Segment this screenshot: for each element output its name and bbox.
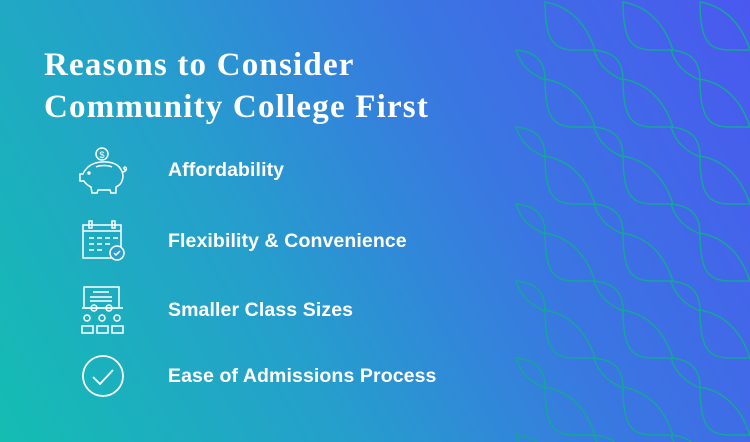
title bbox=[44, 47, 429, 125]
icon: piggy bank: $ bbox=[99, 150, 105, 160]
title: Reasons to Consider bbox=[44, 47, 355, 83]
label: affordability: Affordability bbox=[168, 159, 284, 181]
icon: calendar bbox=[82, 220, 125, 261]
icon: classroom bbox=[81, 286, 124, 334]
label: class sizes: Smaller Class Sizes bbox=[168, 299, 353, 321]
title: Community College First bbox=[44, 89, 429, 125]
icon: check circle bbox=[82, 355, 124, 397]
label: admissions: Ease of Admissions Process bbox=[168, 365, 436, 387]
icon: piggy bank bbox=[79, 147, 128, 194]
label: flexibility: Flexibility & Convenience bbox=[168, 230, 407, 252]
